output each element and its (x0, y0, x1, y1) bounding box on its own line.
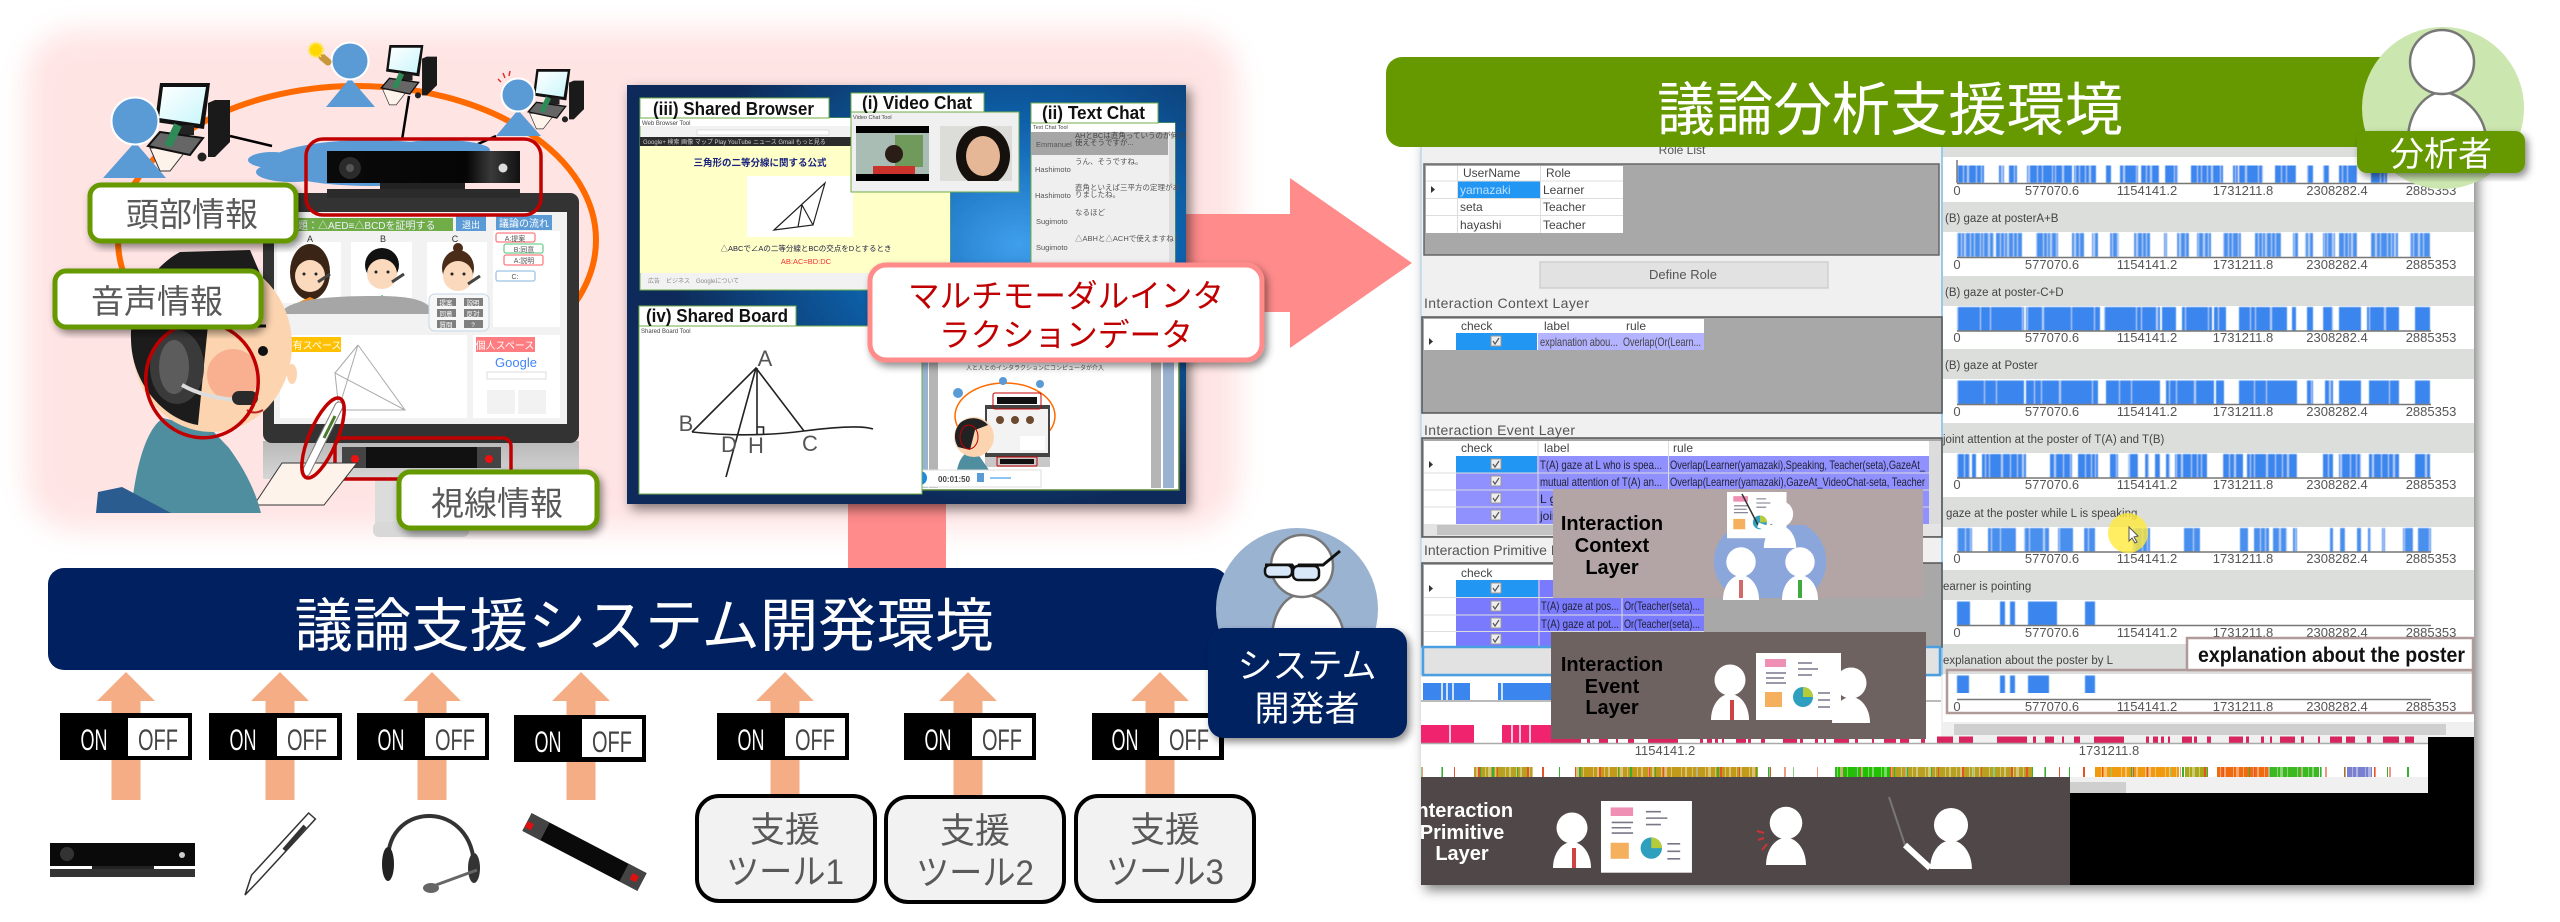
cursor highlight (2108, 513, 2148, 553)
text chat window: Sugimoto (1036, 217, 1068, 226)
on/off switches (60, 713, 1224, 762)
switch 1 (60, 713, 192, 760)
network ring (118, 86, 596, 394)
flow panel: A:提案 (505, 234, 525, 243)
axis tick labels: 577070.6 (2025, 477, 2079, 492)
axis tick labels: 0 (1953, 183, 1961, 198)
overlay: interaction event layer: Layer (1585, 697, 1639, 719)
callout: explanation about the poster: explanation about the poster (2198, 644, 2465, 667)
interaction context layer table: label (1544, 319, 1569, 333)
role list: Teacher (1543, 218, 1586, 232)
switch 6: ON (924, 724, 952, 757)
text chat window: なるほど (1075, 208, 1105, 217)
shared board window: Shared Board Tool (641, 329, 691, 335)
overlay: interaction primitive layer: Primitive (1420, 822, 1504, 844)
axis tick labels: 1731211.8 (2213, 551, 2273, 566)
heading: discussion support system development environment: 議論支援システム開発環境 (294, 594, 994, 659)
axis tick labels: 0 (1953, 625, 1961, 640)
axis tick labels: 2308282.4 (2306, 551, 2368, 566)
interaction context layer table: Interaction Context Layer (1424, 295, 1589, 311)
label: head information: 頭部情報 (126, 196, 258, 233)
axis tick labels: 2885353 (2406, 699, 2456, 714)
axis tick labels: 2308282.4 (2306, 477, 2368, 492)
axis tick labels: 1154141.2 (2117, 477, 2177, 492)
axis tick labels: 0 (1953, 551, 1961, 566)
axis tick labels: 1731211.8 (2213, 404, 2273, 419)
speech act buttons: 反対 (466, 309, 480, 318)
screen header: 議論の流れ (499, 217, 549, 230)
switch 1: OFF (138, 724, 178, 757)
text chat window: △ABHと△ACHで使えますね！ (1075, 233, 1181, 243)
private space (473, 335, 560, 418)
flow panel: B:同意 (514, 245, 534, 254)
role list: Role (1546, 166, 1571, 180)
label: voice information: 音声情報 (91, 283, 223, 320)
lower timeline strips: 1154141.2 (1635, 743, 1695, 758)
switch 7: ON (1112, 724, 1138, 757)
developer figure with glasses (1265, 535, 1344, 640)
text chat window: Hashimoto (1035, 191, 1071, 200)
role list: Role List (1659, 143, 1706, 157)
support tool 2: ツール2 (916, 854, 1034, 893)
text chat window: Hashimoto (1035, 165, 1071, 174)
axis tick labels: 2885353 (2406, 257, 2456, 272)
presentation slide window (912, 355, 1179, 490)
shared browser window: AB:AC=BD:DC (781, 257, 832, 266)
overlay: interaction event layer: Event (1585, 676, 1640, 698)
axis tick labels: 2308282.4 (2306, 183, 2368, 198)
axis tick labels: 1154141.2 (2117, 183, 2177, 198)
interaction event layer table: Overlap(Learner(yamazaki),Speaking, Teacher(seta),GazeAt_ (1670, 458, 1925, 472)
role list: UserName (1463, 166, 1521, 180)
shared browser window: 三角形の二等分線に関する公式 (693, 157, 827, 169)
private space: 個人スペース (476, 339, 534, 352)
switch 1: ON (80, 724, 108, 757)
shared board window: C (802, 431, 818, 456)
row labels: (B) gaze at posterA+B (1945, 213, 2059, 225)
learner wearing headset (96, 250, 357, 513)
interaction context layer table: rule (1626, 319, 1646, 333)
switch 4 (514, 715, 646, 762)
multi-colour primitive strip (1421, 767, 2428, 793)
interaction primitive layer table: T(A) gaze at pot... (1541, 617, 1619, 631)
avatars A, B, C (277, 234, 487, 303)
axis tick labels: 2885353 (2406, 404, 2456, 419)
selected button (1423, 647, 1940, 675)
axis tick labels: 1154141.2 (2117, 551, 2177, 566)
axis tick labels: 1731211.8 (2213, 625, 2273, 640)
network cloud (230, 96, 496, 186)
switch 4: ON (534, 726, 562, 759)
text chat window: Emmanuel (1036, 140, 1072, 149)
axis tick labels: 2308282.4 (2306, 404, 2368, 419)
axis tick labels: 577070.6 (2025, 551, 2079, 566)
support tool 1: 支援 (750, 811, 820, 850)
text chat label: (ii) Text Chat (1042, 103, 1145, 123)
axis tick labels: 577070.6 (2025, 625, 2079, 640)
panel: analysis tool screenshot (1411, 140, 2474, 885)
axis tick labels: 2885353 (2406, 330, 2456, 345)
timeline bars (1957, 171, 2431, 688)
support tool 1 (697, 796, 875, 901)
interaction event layer table: T(A) gaze at L who is spea... (1540, 458, 1662, 472)
switch 4: OFF (592, 726, 632, 759)
role list: Teacher (1543, 200, 1586, 214)
interaction event layer table: mutual attention of T(A) an... (1540, 475, 1662, 489)
interaction primitive layer table: check (1461, 566, 1493, 580)
overlay: interaction primitive layer: Interaction (1411, 800, 1513, 822)
icon: digital pen (245, 813, 315, 895)
speech act buttons: 質問 (440, 320, 452, 329)
define role button (1540, 262, 1828, 288)
icon: eye tracker device (524, 821, 642, 882)
interaction context layer table: Overlap(Or(Learn... (1623, 335, 1701, 349)
heading: discussion analysis support environment: 議論分析支援環境 (1657, 78, 2123, 143)
vertical connector bar (848, 495, 946, 570)
axis tick labels: 2308282.4 (2306, 699, 2368, 714)
speech act buttons: 提案 (440, 298, 453, 307)
label: voice information (55, 271, 261, 327)
axis tick labels: 2308282.4 (2306, 330, 2368, 345)
shared browser window: Google+ 検索 画像 マップ Play YouTube ニュース Gmail もっと見る (643, 138, 826, 146)
text chat window: Text Chat Tool (1033, 125, 1068, 131)
shared board window: D (721, 432, 737, 457)
avatars A, B, C: A (307, 234, 313, 244)
presentation slide window: 人と人とのインタラクションにコンピュータが介入 (966, 364, 1104, 372)
remote participant 2 with light bulb (309, 42, 437, 107)
speech act buttons (429, 294, 489, 331)
lower timeline strips (1421, 677, 2474, 885)
support tool 3: 支援 (1130, 811, 1200, 850)
overlay: interaction context layer: Layer (1585, 557, 1639, 579)
interaction event layer table (1422, 422, 1942, 537)
text chat window: AHとBCは直角っていうのが何か (1075, 130, 1186, 140)
screen header: 題：△AED≡△BCDを証明する (298, 220, 436, 232)
eye tracker (342, 447, 501, 468)
virtual table (281, 296, 433, 314)
pink background region (26, 30, 1238, 530)
define role button: Define Role (1649, 267, 1717, 282)
shared space (280, 335, 467, 418)
axis tick labels: 0 (1953, 330, 1961, 345)
interaction primitive layer table: T(A) gaze at pos... (1541, 599, 1619, 613)
switch 2: OFF (287, 724, 327, 757)
remote participant 1 (103, 83, 230, 178)
axis tick labels: 1154141.2 (2117, 330, 2177, 345)
support tool 1: ツール1 (726, 853, 844, 892)
shared browser window: △ABCで∠Aの二等分線とBCの交点をDとするとき (720, 243, 892, 253)
callout: multimodal interaction data: ラクションデータ (939, 317, 1193, 353)
axis tick labels: 2885353 (2406, 183, 2456, 198)
shared board window: H (748, 433, 764, 458)
analyst persona (2357, 27, 2525, 189)
axis tick labels: 1154141.2 (2117, 257, 2177, 272)
axis tick labels: 1731211.8 (2213, 257, 2273, 272)
row labels: earner is pointing (1943, 581, 2031, 593)
interaction primitive layer table: Or(Teacher(seta)... (1624, 599, 1700, 613)
overlay: interaction context layer: Context (1575, 535, 1650, 557)
axis tick labels: 2308282.4 (2306, 625, 2368, 640)
text chat window (1031, 123, 1186, 288)
axis tick labels: 0 (1953, 699, 1961, 714)
interaction event layer table: Overlap(Learner(yamazaki),GazeAt_VideoChat-seta, Teacher (1670, 475, 1925, 489)
text chat window: りましたね。 (1075, 190, 1120, 199)
callout: explanation about the poster (1947, 638, 2473, 713)
axis tick labels: 0 (1953, 477, 1961, 492)
row labels: gaze at the poster while L is speaking (1946, 508, 2137, 520)
switch 7 (1092, 713, 1224, 760)
interaction primitive layer table: Interaction Primitive Layer (1424, 542, 1586, 558)
label: gaze information: 視線情報 (431, 485, 563, 522)
overlay: interaction event layer (1551, 632, 1926, 739)
interaction context layer table: explanation abou... (1540, 335, 1618, 349)
icon: Kinect device (50, 843, 195, 877)
row labels: joint attention at the poster of T(A) and T(B) (1942, 434, 2165, 446)
analyst figure (2408, 30, 2486, 140)
heading: discussion support system development environment (48, 568, 1228, 670)
axis tick labels: 1154141.2 (2117, 404, 2177, 419)
avatars A, B, C: C (452, 234, 459, 244)
switch 3: OFF (435, 724, 475, 757)
Kinect sensor (327, 151, 520, 198)
callout: multimodal interaction data: マルチモーダルインタ (908, 278, 1224, 314)
row labels (1942, 213, 2165, 667)
video chat label: (i) Video Chat (862, 93, 972, 113)
interaction event layer table: L gaze (1540, 492, 1576, 506)
support tool 2 (886, 797, 1064, 902)
panel: timeline charts (1937, 147, 2474, 737)
role list: hayashi (1460, 218, 1501, 232)
lower timeline strips: 1731211.8 (2079, 743, 2139, 758)
icon: headset (382, 816, 480, 893)
shared board label: (iv) Shared Board (646, 306, 788, 326)
row labels: (B) gaze at poster-C+D (1945, 287, 2064, 299)
flow panel (493, 231, 560, 327)
shared board window (639, 326, 922, 494)
speech act buttons: ? (471, 322, 475, 329)
red marker: headset (130, 306, 274, 454)
switch 5: OFF (795, 724, 835, 757)
axis tick labels: 2308282.4 (2306, 257, 2368, 272)
red marker: Kinect (306, 139, 541, 215)
red marker: eye tracker (335, 438, 511, 479)
switch 2: ON (230, 724, 256, 757)
axis tick labels: 0 (1953, 404, 1961, 419)
flow panel: A:説明 (514, 256, 534, 265)
overlay: interaction primitive layer: Layer (1435, 843, 1489, 865)
axis tick labels: 1154141.2 (2117, 699, 2177, 714)
screen header (294, 215, 552, 232)
row labels: explanation about the poster by L (1943, 655, 2114, 667)
axis tick labels: 1731211.8 (2213, 330, 2273, 345)
switch 2 (209, 713, 342, 760)
role list (1424, 143, 1939, 255)
context illustration (1714, 492, 1826, 600)
text chat window: うん、そうですね。 (1075, 157, 1142, 166)
panel: layer tables (1421, 143, 1942, 677)
desktop monitor (263, 193, 579, 537)
interaction event layer table: rule (1673, 441, 1693, 455)
developer label: 開発者 (1254, 690, 1360, 729)
axis tick labels: 2885353 (2406, 477, 2456, 492)
switch 3 (357, 713, 489, 760)
overlay: interaction context layer: Interaction (1561, 513, 1663, 535)
scrollbar (1937, 722, 2474, 737)
video chat window: Video Chat Tool (853, 115, 892, 121)
axis tick labels: 577070.6 (2025, 330, 2079, 345)
analyst label: 分析者 (2390, 136, 2492, 174)
switch 3: ON (378, 724, 404, 757)
axis tick labels: 1731211.8 (2213, 183, 2273, 198)
system developer persona (1208, 528, 1407, 738)
axis tick labels: 577070.6 (2025, 183, 2079, 198)
speech act buttons: 同意 (440, 309, 453, 318)
axis tick labels: 0 (1953, 257, 1961, 272)
switch 6 (904, 713, 1036, 760)
role list: Learner (1543, 183, 1584, 197)
interaction primitive layer table: Or(Teacher(seta)... (1624, 617, 1700, 631)
axis tick labels: 1731211.8 (2213, 699, 2273, 714)
switch 7: OFF (1169, 724, 1209, 757)
interaction event layer table: check (1461, 441, 1493, 455)
axis tick labels: 2885353 (2406, 625, 2456, 640)
switch 5 (717, 713, 849, 760)
overlay: interaction event layer: Interaction (1561, 654, 1663, 676)
interaction primitive layer table (1422, 542, 1942, 647)
video chat window (851, 112, 1019, 192)
red marker: pen (293, 393, 353, 483)
role list: yamazaki (1460, 183, 1511, 197)
interaction event layer table: joint (1539, 509, 1563, 523)
shared browser label: (iii) Shared Browser (653, 99, 814, 119)
panel: collaborative tools desktop (627, 85, 1186, 504)
shared browser window: 広告 ビジネス Googleについて (648, 277, 739, 285)
shared browser window (640, 118, 950, 290)
flow panel: C: (512, 274, 519, 281)
overlay: interaction primitive layer (1411, 777, 2070, 885)
developer label (1208, 628, 1407, 738)
axis tick labels: 1731211.8 (2213, 477, 2273, 492)
shared board window: A (758, 346, 773, 371)
avatars A, B, C: B (380, 234, 386, 244)
analyst label (2357, 131, 2525, 174)
event illustration (1711, 653, 1870, 723)
interaction context layer table: check (1461, 319, 1493, 333)
switch 6: OFF (982, 724, 1022, 757)
shared browser window: Web Browser Tool (642, 121, 690, 127)
text chat window: 直角といえば三平方の定理があ (1075, 182, 1180, 192)
text chat window: 使えそうですが... (1075, 137, 1134, 147)
axis tick labels: 577070.6 (2025, 257, 2079, 272)
support tool 3: ツール3 (1106, 853, 1224, 892)
support tool 3 (1076, 796, 1254, 901)
role list: seta (1460, 200, 1483, 214)
axis tick labels (1953, 183, 2456, 714)
presentation slide window: 00:01:50 (938, 475, 971, 484)
remote participant 3 (496, 69, 584, 136)
axis tick labels: 577070.6 (2025, 699, 2079, 714)
axis tick labels: 2885353 (2406, 551, 2456, 566)
screen header: 退出 (462, 219, 480, 230)
label: gaze information (399, 472, 597, 528)
input arrows (97, 672, 1189, 800)
overlay: interaction context layer (1553, 489, 1923, 600)
row labels: (B) gaze at Poster (1945, 360, 2038, 372)
primitive illustrations (1553, 797, 1972, 873)
label: head information (90, 185, 296, 241)
heading: discussion analysis support environment (1386, 57, 2385, 147)
shared board window: B (679, 411, 693, 436)
text chat window: Sugimoto (1036, 243, 1068, 252)
timeline axes (1957, 160, 2431, 700)
interaction context layer table (1422, 295, 1942, 413)
developer label: システム (1238, 647, 1376, 686)
horizontal arrow to analysis environment (1180, 178, 1412, 348)
speech act buttons: 説明 (466, 298, 480, 307)
support tool 2: 支援 (940, 812, 1010, 851)
black background areas (2070, 737, 2474, 885)
interaction event layer table: label (1544, 441, 1569, 455)
private space: Google (495, 355, 537, 370)
axis tick labels: 1154141.2 (2117, 625, 2177, 640)
axis tick labels: 577070.6 (2025, 404, 2079, 419)
callout: multimodal interaction data (870, 265, 1262, 360)
switch 5: ON (738, 724, 764, 757)
shared space: 共有スペース (283, 339, 341, 352)
interaction event layer table: Interaction Event Layer (1424, 422, 1575, 438)
